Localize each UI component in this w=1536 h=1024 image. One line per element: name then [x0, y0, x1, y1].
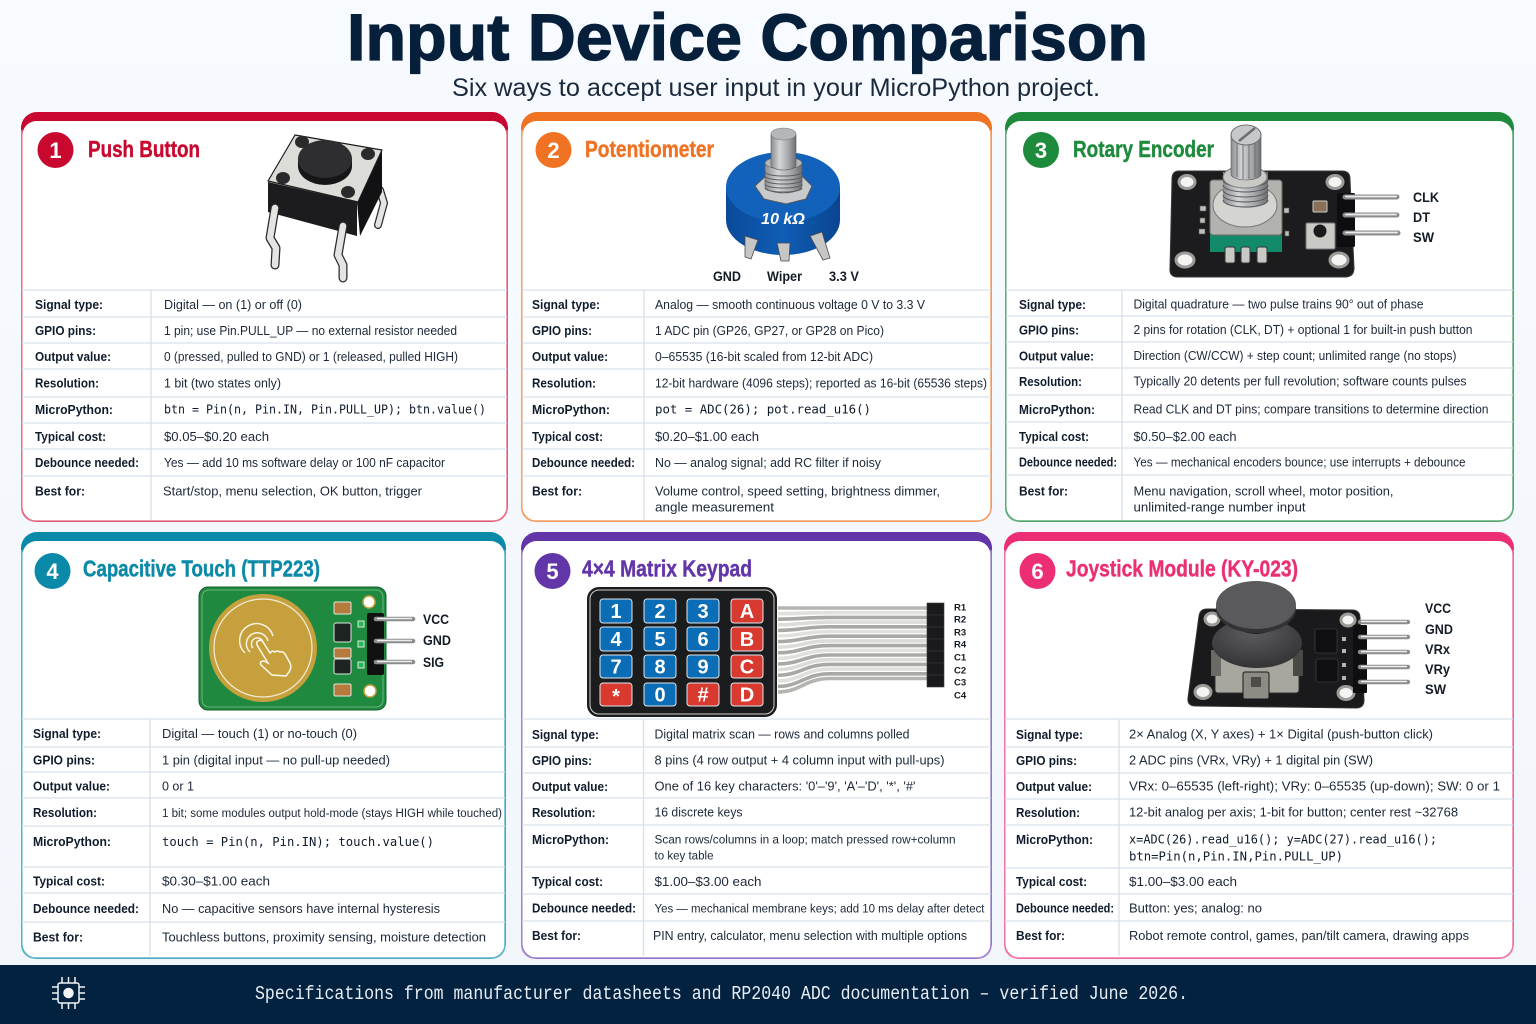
row: resolution: 12-bit analog per axis; 1-bit for button; center rest ~32768: [1129, 804, 1458, 820]
row: MicroPython: to key table: [654, 848, 714, 862]
row: resolution: 16 discrete keys: [654, 804, 743, 820]
row: MicroPython: [532, 832, 956, 862]
row: debounce needed: [33, 901, 440, 916]
row: GPIO pins: 1 ADC pin (GP26, GP27, or GP28 on Pico): [655, 323, 884, 338]
row: signal type: Digital matrix scan — rows and columns polled: [654, 726, 910, 742]
badge 5: [534, 553, 570, 589]
icon: TTP223 touch module: [199, 587, 413, 710]
row: resolution: Resolution:: [532, 376, 596, 390]
row: GPIO pins: GPIO pins:: [1016, 753, 1077, 768]
row: resolution: [532, 804, 743, 820]
pin labels: GND: [713, 269, 741, 284]
footer bar: [0, 965, 1536, 1024]
heading: Potentiometer: Potentiometer: [585, 136, 714, 162]
pin labels: [1413, 190, 1439, 245]
badge 1: 1: [49, 138, 62, 163]
row: MicroPython: [35, 402, 486, 417]
row: MicroPython: btn=Pin(n,Pin.IN,Pin.PULL_UP): [1129, 848, 1343, 864]
row: best for: Best for:: [33, 930, 83, 944]
row: MicroPython: MicroPython:: [35, 402, 113, 417]
connector pin labels: C4: [954, 690, 967, 702]
badge 2: [536, 132, 572, 168]
pin labels: 3.3 V: [829, 269, 859, 284]
panel: joystick: [1004, 532, 1514, 959]
key labels: 0: [654, 684, 666, 706]
pin labels: [1425, 601, 1453, 697]
row: best for: Volume control, speed setting, brightness dimmer,: [655, 484, 940, 498]
row: debounce needed: [35, 455, 446, 470]
row: output value: [33, 778, 194, 794]
pin labels: DT: [1413, 210, 1431, 225]
connector pin labels: R3: [954, 628, 966, 638]
key labels: 1: [610, 601, 622, 623]
key labels: 5: [654, 629, 666, 651]
row: output value: Direction (CW/CCW) + step count; unlimited range (no stops): [1134, 348, 1456, 363]
label: 10 kΩ: 10 kΩ: [761, 211, 805, 228]
row: debounce needed: Debounce needed:: [1016, 900, 1114, 916]
row: output value: VRx: 0–65535 (left-right); VRy: 0–65535 (up-down); SW: 0 or 1: [1129, 778, 1500, 794]
row: signal type: Digital quadrature — two pulse trains 90° out of phase: [1134, 296, 1424, 312]
row: output value: 0 or 1: [162, 778, 194, 794]
row: best for: [532, 928, 967, 943]
key labels: 7: [610, 656, 622, 678]
row: GPIO pins: [532, 752, 944, 768]
icon: membrane keypad: [587, 587, 944, 717]
row: MicroPython: [1016, 832, 1437, 864]
pin labels: VRy: [1425, 662, 1450, 677]
row: debounce needed: [1016, 900, 1262, 916]
panel: capacitive touch: [21, 532, 506, 959]
row: MicroPython: pot = ADC(26); pot.read_u16(): [655, 402, 871, 416]
panel: rotary encoder: [1005, 112, 1514, 522]
row: resolution: 12-bit hardware (4096 steps); reported as 16-bit (65536 steps): [655, 376, 987, 390]
heading: Capacitive Touch (TTP223): Capacitive Touch (TTP223): [83, 556, 320, 582]
key labels: #: [697, 684, 709, 706]
row: best for: Best for:: [532, 928, 581, 943]
key labels: B: [740, 629, 754, 651]
row: resolution: Typically 20 detents per full revolution; software counts pulses: [1134, 374, 1467, 388]
subtitle: Six ways to accept user input in your MicroPython project.: [452, 74, 1100, 102]
row: MicroPython: x=ADC(26).read_u16(); y=ADC(27).read_u16();: [1129, 832, 1437, 846]
row: best for: Robot remote control, games, pan/tilt camera, drawing apps: [1129, 928, 1469, 943]
row: debounce needed: Debounce needed:: [35, 455, 139, 470]
row: MicroPython: btn = Pin(n, Pin.IN, Pin.PULL_UP); btn.value(): [164, 402, 486, 416]
row: GPIO pins: 8 pins (4 row output + 4 column input with pull-ups): [654, 752, 944, 768]
row: GPIO pins: GPIO pins:: [532, 323, 592, 338]
pin labels: SW: [1413, 230, 1434, 245]
row: signal type: Signal type:: [532, 727, 599, 742]
row: signal type: Signal type:: [532, 297, 600, 312]
row: MicroPython: touch = Pin(n, Pin.IN); touch.value(): [162, 834, 434, 849]
key labels: *: [612, 686, 620, 708]
row: GPIO pins: GPIO pins:: [33, 752, 95, 768]
row: typical cost: $0.50–$2.00 each: [1134, 429, 1236, 444]
row: typical cost: Typical cost:: [33, 874, 105, 888]
row: debounce needed: Debounce needed:: [33, 901, 139, 916]
heading: Joystick Module (KY-023): Joystick Module (KY-023): [1066, 556, 1298, 582]
row: resolution: 1 bit; some modules output hold-mode (stays HIGH while touched): [162, 806, 502, 820]
row: output value: 0–65535 (16-bit scaled from 12-bit ADC): [655, 349, 873, 364]
connector pin labels: C3: [954, 678, 966, 688]
row: debounce needed: Yes — mechanical membrane keys; add 10 ms delay after detect: [654, 902, 985, 916]
row: MicroPython: Read CLK and DT pins; compare transitions to determine direction: [1134, 402, 1488, 416]
key labels: 6: [697, 629, 709, 651]
row: signal type: Analog — smooth continuous voltage 0 V to 3.3 V: [655, 297, 925, 312]
row: typical cost: Typical cost:: [532, 874, 603, 889]
row: GPIO pins: [1016, 752, 1373, 768]
row: output value: Output value:: [1019, 348, 1094, 364]
row: typical cost: $1.00–$3.00 each: [1129, 874, 1237, 889]
row: typical cost: $0.20–$1.00 each: [655, 429, 759, 444]
row: best for: Best for:: [1016, 928, 1065, 943]
row: best for: Best for:: [1019, 484, 1068, 498]
row: typical cost: Typical cost:: [532, 429, 603, 444]
row: output value: Output value:: [532, 349, 608, 364]
row: MicroPython: [33, 834, 434, 849]
key labels: C: [740, 656, 754, 678]
row: GPIO pins: 1 pin; use Pin.PULL_UP — no external resistor needed: [164, 323, 457, 338]
row: signal type: Signal type:: [1016, 727, 1083, 742]
row: best for: [1019, 484, 1394, 514]
row: debounce needed: No — analog signal; add RC filter if noisy: [655, 455, 881, 470]
row: best for: Touchless buttons, proximity sensing, moisture detection: [162, 930, 486, 944]
icon: tactile push button: [268, 135, 384, 278]
badge 2: 2: [547, 138, 560, 163]
row: GPIO pins: [532, 323, 884, 338]
row: typical cost: [35, 429, 269, 444]
row: GPIO pins: 2 ADC pins (VRx, VRy) + 1 digital pin (SW): [1129, 752, 1373, 768]
row: resolution: [33, 805, 502, 820]
row: output value: Output value:: [532, 779, 608, 794]
row: best for: PIN entry, calculator, menu selection with multiple options: [653, 928, 967, 943]
connector pin labels: R4: [954, 640, 967, 650]
row: signal type: [1016, 726, 1433, 742]
key labels: 2: [654, 601, 666, 623]
row: GPIO pins: 1 pin (digital input — no pull-up needed): [162, 752, 390, 768]
row: typical cost: $0.30–$1.00 each: [162, 874, 270, 888]
row: best for: Best for:: [35, 484, 85, 498]
heading: 4×4 Matrix Keypad: 4×4 Matrix Keypad: [582, 556, 752, 582]
badge 4: [34, 553, 70, 589]
row: best for: [35, 484, 423, 498]
row: MicroPython: MicroPython:: [1019, 402, 1095, 417]
row: debounce needed: [532, 455, 881, 470]
row: signal type: [33, 726, 357, 741]
row: typical cost: [1016, 874, 1237, 889]
row: signal type: Signal type:: [1019, 297, 1086, 312]
row: signal type: [532, 297, 925, 312]
badge 3: 3: [1035, 138, 1047, 163]
pin labels: VCC: [423, 612, 449, 627]
row: resolution: [35, 376, 281, 390]
badge 6: [1020, 553, 1056, 589]
badge 5: 5: [546, 559, 559, 584]
row: typical cost: [33, 874, 270, 888]
row: GPIO pins: 2 pins for rotation (CLK, DT) + optional 1 for built-in push button: [1134, 322, 1472, 337]
icon: rotary potentiometer: [726, 128, 840, 261]
icon: joystick module: [1188, 581, 1408, 708]
row: resolution: 1 bit (two states only): [164, 376, 281, 390]
connector pin labels: R1: [954, 602, 967, 614]
row: debounce needed: Debounce needed:: [532, 455, 635, 470]
key labels: A: [740, 601, 754, 623]
pin labels: GND: [423, 633, 451, 648]
row: signal type: Signal type:: [33, 726, 101, 741]
connector pin labels: C2: [954, 666, 966, 676]
pin labels: CLK: [1413, 190, 1439, 205]
row: typical cost: [532, 874, 762, 889]
badge 6: 6: [1031, 559, 1044, 584]
pin labels: SW: [1425, 682, 1446, 697]
row: MicroPython: [1019, 402, 1488, 417]
row: signal type: Digital — touch (1) or no-touch (0): [162, 726, 357, 741]
row: signal type: [1019, 296, 1424, 312]
row: debounce needed: Yes — mechanical encoders bounce; use interrupts + debounce: [1134, 454, 1466, 470]
key labels: 8: [654, 656, 666, 678]
row: typical cost: Typical cost:: [35, 429, 106, 444]
row: best for: unlimited-range number input: [1134, 500, 1306, 514]
pin labels: SIG: [423, 655, 444, 670]
heading: Rotary Encoder: Rotary Encoder: [1073, 136, 1214, 162]
row: output value: [532, 778, 916, 794]
panel: push button: [21, 112, 508, 522]
footer note: Specifications from manufacturer datasheets and RP2040 ADC documentation – verified June 2026.: [255, 983, 1188, 1005]
row: output value: 0 (pressed, pulled to GND) or 1 (released, pulled HIGH): [164, 349, 458, 364]
pin labels: [423, 612, 451, 670]
panel: potentiometer: [521, 112, 992, 522]
heading: Push Button: Push Button: [88, 136, 200, 162]
row: MicroPython: [532, 402, 871, 417]
row: signal type: 2× Analog (X, Y axes) + 1× Digital (push-button click): [1129, 726, 1433, 742]
row: MicroPython: MicroPython:: [33, 834, 111, 849]
row: typical cost: [532, 429, 759, 444]
row: debounce needed: Debounce needed:: [532, 900, 636, 916]
row: resolution: Resolution:: [1019, 374, 1082, 389]
row: resolution: [532, 376, 987, 390]
row: MicroPython: Scan rows/columns in a loop; match pressed row+column: [654, 832, 956, 846]
row: resolution: Resolution:: [1016, 805, 1080, 820]
row: MicroPython: MicroPython:: [532, 832, 609, 847]
connector pin labels: [954, 602, 967, 702]
connector pin labels: R2: [954, 614, 966, 626]
title: Input Device Comparison: [347, 0, 1148, 74]
key labels: D: [740, 684, 754, 706]
row: output value: One of 16 key characters: '0'–'9', 'A'–'D', '*', '#': [654, 778, 916, 794]
keypad keys: [600, 599, 763, 706]
row: debounce needed: [532, 900, 985, 916]
badge 1: [38, 132, 74, 168]
pin labels: Wiper: [767, 269, 803, 284]
row: debounce needed: No — capacitive sensors have internal hysteresis: [162, 901, 440, 916]
row: signal type: [35, 297, 302, 312]
row: resolution: Resolution:: [35, 376, 99, 390]
pin labels: VRx: [1425, 642, 1450, 657]
pin labels: [713, 269, 859, 284]
row: best for: [532, 484, 940, 514]
row: typical cost: Typical cost:: [1019, 429, 1089, 444]
row: GPIO pins: GPIO pins:: [35, 323, 96, 338]
key labels: 3: [697, 601, 709, 623]
row: output value: [1019, 348, 1456, 364]
key labels: 9: [697, 656, 709, 678]
connector pin labels: C1: [954, 652, 967, 664]
row: debounce needed: Debounce needed:: [1019, 454, 1117, 470]
key labels: 4: [610, 629, 622, 651]
row: typical cost: [1019, 429, 1236, 444]
icon: rotary encoder module: [1170, 125, 1398, 277]
row: debounce needed: Button: yes; analog: no: [1129, 900, 1262, 916]
row: GPIO pins: GPIO pins:: [1019, 322, 1079, 338]
row: output value: [532, 349, 873, 364]
pin labels: VCC: [1425, 601, 1451, 616]
row: best for: Best for:: [532, 484, 582, 498]
badge 4: 4: [46, 559, 59, 584]
row: output value: Output value:: [1016, 779, 1092, 794]
row: best for: Menu navigation, scroll wheel, motor position,: [1134, 484, 1394, 498]
row: MicroPython: MicroPython:: [1016, 832, 1093, 847]
row: GPIO pins: GPIO pins:: [532, 753, 592, 768]
badge 3: [1023, 132, 1059, 168]
row: typical cost: Typical cost:: [1016, 874, 1087, 889]
row: MicroPython: MicroPython:: [532, 402, 610, 417]
row: output value: Output value:: [33, 778, 110, 794]
row: GPIO pins: [33, 752, 390, 768]
row: typical cost: $0.05–$0.20 each: [164, 429, 269, 444]
row: best for: angle measurement: [655, 500, 774, 514]
row: GPIO pins: [35, 323, 457, 338]
row: output value: [35, 349, 458, 364]
row: best for: Start/stop, menu selection, OK button, trigger: [163, 484, 423, 498]
pin labels: GND: [1425, 622, 1453, 637]
row: signal type: Signal type:: [35, 297, 103, 312]
icon: microchip: [52, 977, 85, 1009]
row: resolution: Resolution:: [532, 805, 596, 820]
row: GPIO pins: [1019, 322, 1472, 338]
row: signal type: Digital — on (1) or off (0): [164, 297, 302, 312]
row: debounce needed: [1019, 454, 1466, 470]
key labels: [610, 601, 754, 708]
row: resolution: Resolution:: [33, 805, 97, 820]
row: debounce needed: Yes — add 10 ms software delay or 100 nF capacitor: [164, 455, 446, 470]
row: signal type: [532, 726, 910, 742]
row: output value: Output value:: [35, 349, 111, 364]
panel: matrix keypad: [521, 532, 992, 959]
row: resolution: [1019, 374, 1467, 389]
row: typical cost: $1.00–$3.00 each: [654, 874, 762, 889]
